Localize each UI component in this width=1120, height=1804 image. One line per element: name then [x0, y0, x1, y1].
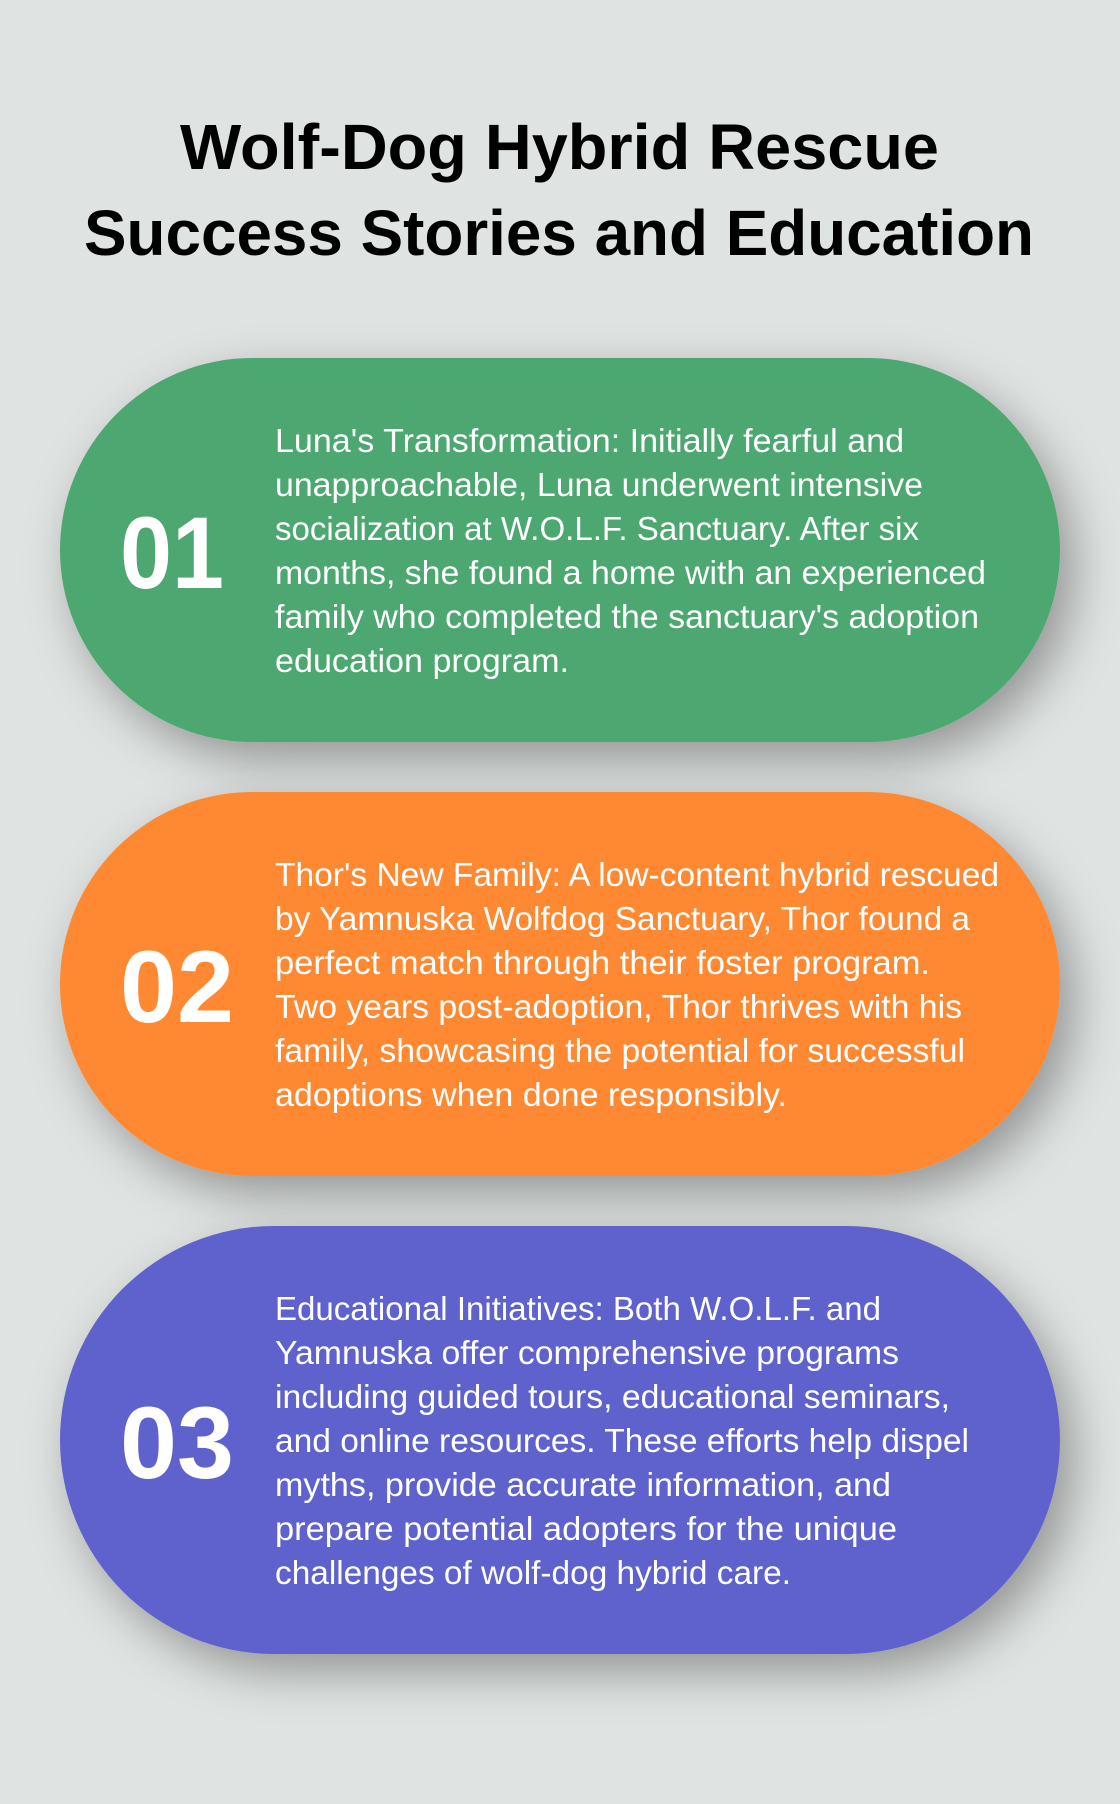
number 03: 03 — [120, 1386, 234, 1500]
story text: Thor: by Yamnuska Wolfdog Sanctuary, Thor found a — [275, 900, 971, 937]
panel: Educational Initiatives — [60, 1226, 1060, 1654]
story text: Thor: Two years post-adoption, Thor thrives with his — [275, 988, 962, 1025]
orange pill background — [60, 792, 1060, 1176]
story text: Luna: Luna's Transformation: Initially fearful and — [275, 422, 904, 459]
panel: Thor's New Family — [60, 792, 1060, 1176]
title: Wolf-Dog Hybrid Rescue — [180, 111, 939, 183]
title — [84, 111, 1034, 269]
story text: education: challenges of wolf-dog hybrid care. — [275, 1554, 791, 1591]
story text: education — [275, 1290, 969, 1591]
story text: Thor: Thor's New Family: A low-content hybrid rescued — [275, 856, 999, 893]
purple pill background — [60, 1226, 1060, 1654]
story text: Luna: socialization at W.O.L.F. Sanctuary. After six — [275, 510, 919, 547]
story text: Luna: months, she found a home with an experienced — [275, 554, 986, 591]
story text: Thor: perfect match through their foster program. — [275, 944, 930, 981]
story text: education: Yamnuska offer comprehensive programs — [275, 1334, 899, 1371]
panel: Luna's Transformation — [60, 358, 1060, 742]
story text: Thor: family, showcasing the potential for successful — [275, 1032, 965, 1069]
story text: Luna: family who completed the sanctuary's adoption — [275, 598, 979, 635]
number 01: 01 — [120, 496, 224, 610]
title: Success Stories and Education — [84, 197, 1034, 269]
story text: education: Educational Initiatives: Both W.O.L.F. and — [275, 1290, 881, 1327]
story text: education: prepare potential adopters for the unique — [275, 1510, 897, 1547]
story text: education: including guided tours, educational seminars, — [275, 1378, 950, 1415]
number 02: 02 — [120, 930, 234, 1044]
green pill background — [60, 358, 1060, 742]
story text: Luna: education program. — [275, 642, 569, 679]
story text: Luna: unapproachable, Luna underwent intensive — [275, 466, 923, 503]
story text: education: myths, provide accurate information, and — [275, 1466, 891, 1503]
story text: Thor: adoptions when done responsibly. — [275, 1076, 787, 1113]
story text: Luna — [275, 422, 986, 679]
story text: Thor — [275, 856, 999, 1113]
story text: education: and online resources. These efforts help dispel — [275, 1422, 969, 1459]
